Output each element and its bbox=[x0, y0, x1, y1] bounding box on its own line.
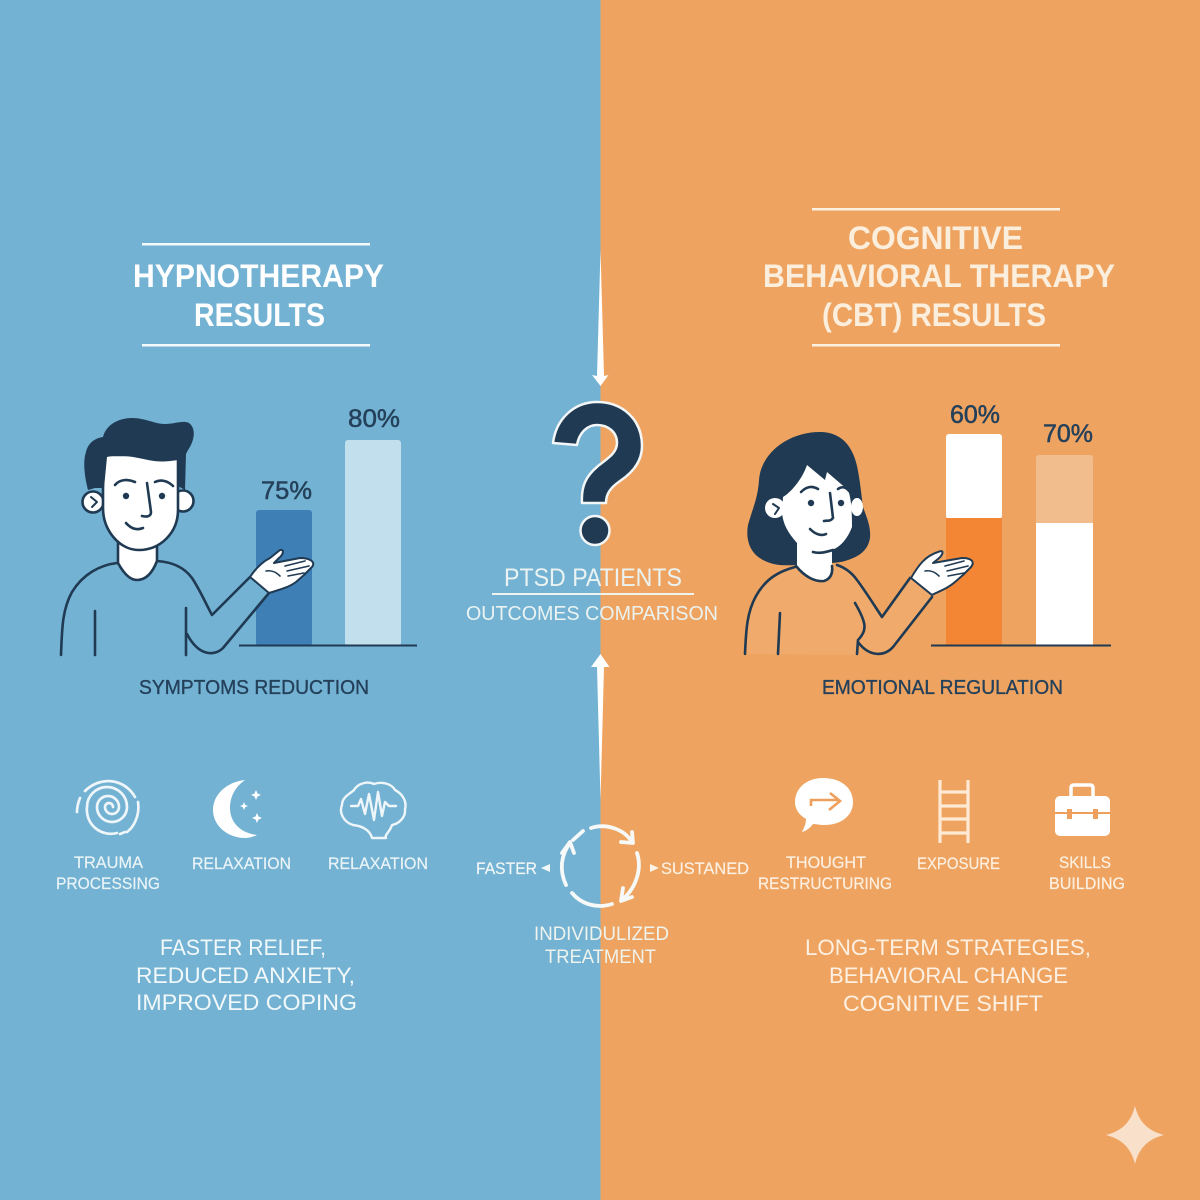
heading: CBT results: COGNITIVE bbox=[848, 220, 1023, 256]
bar chart: symptoms reduction: 80% bbox=[348, 405, 400, 433]
illustration: woman presenting bbox=[745, 432, 973, 655]
icon: speech bubble with arrow bbox=[795, 778, 853, 832]
caption: symptoms reduction: SYMPTOMS REDUCTION bbox=[139, 677, 369, 699]
label: relaxation: RELAXATION bbox=[192, 854, 291, 873]
center label: PTSD patients outcomes comparison: PTSD PATIENTS bbox=[504, 564, 682, 592]
label: trauma processing: PROCESSING bbox=[56, 874, 160, 893]
cycle diagram: faster, sustained: FASTER bbox=[476, 859, 537, 878]
label: individualized treatment bbox=[534, 924, 669, 968]
text block: hypnotherapy benefits: IMPROVED COPING bbox=[136, 990, 357, 1015]
icon: moon and stars, relaxation bbox=[213, 780, 262, 838]
label: exposure: EXPOSURE bbox=[917, 854, 1000, 873]
icon: ladder bbox=[940, 780, 968, 843]
heading: CBT results: (CBT) RESULTS bbox=[822, 297, 1046, 333]
text block: CBT benefits: COGNITIVE SHIFT bbox=[843, 991, 1043, 1016]
panel: CBT background bbox=[600, 0, 1200, 1200]
text block: hypnotherapy benefits: FASTER RELIEF, bbox=[160, 935, 326, 960]
label: individualized treatment: TREATMENT bbox=[545, 947, 656, 968]
cycle diagram: faster, sustained: SUSTANED bbox=[661, 859, 749, 878]
icon: question mark bbox=[553, 402, 642, 545]
label: thought restructuring bbox=[758, 853, 892, 893]
label: trauma processing bbox=[56, 853, 160, 893]
arrow: bottom pointing up bbox=[591, 654, 610, 800]
heading: hypnotherapy results bbox=[133, 243, 384, 346]
icon: brain with wave bbox=[341, 783, 406, 838]
panel: hypnotherapy background bbox=[0, 0, 600, 1200]
illustration: man presenting bbox=[61, 418, 313, 655]
text block: CBT benefits bbox=[805, 935, 1091, 1016]
center label: PTSD patients outcomes comparison bbox=[466, 564, 718, 625]
label: skills building: BUILDING bbox=[1049, 874, 1125, 893]
cycle diagram: faster, sustained bbox=[476, 826, 749, 906]
bar chart: emotional regulation: 70% bbox=[1043, 420, 1093, 448]
bar chart: symptoms reduction bbox=[239, 405, 417, 646]
text block: hypnotherapy benefits: REDUCED ANXIETY, bbox=[136, 963, 355, 988]
bar chart: symptoms reduction: 75% bbox=[261, 477, 312, 505]
text block: CBT benefits: BEHAVIORAL CHANGE bbox=[829, 963, 1068, 988]
text block: hypnotherapy benefits bbox=[136, 935, 357, 1015]
label: skills building bbox=[1049, 853, 1125, 893]
heading: hypnotherapy results: RESULTS bbox=[194, 297, 325, 333]
icon: spiral, trauma processing bbox=[77, 781, 138, 834]
center label: PTSD patients outcomes comparison: OUTCOMES COMPARISON bbox=[466, 603, 718, 625]
label: trauma processing: TRAUMA bbox=[74, 853, 144, 872]
icon: briefcase bbox=[1055, 785, 1110, 836]
label: skills building: SKILLS bbox=[1059, 853, 1111, 872]
label: thought restructuring: RESTRUCTURING bbox=[758, 874, 892, 893]
heading: CBT results bbox=[763, 208, 1115, 346]
heading: hypnotherapy results: HYPNOTHERAPY bbox=[133, 258, 384, 294]
label: relaxation second: RELAXATION bbox=[328, 854, 428, 873]
label: individualized treatment: INDIVIDULIZED bbox=[534, 924, 669, 945]
arrow: top pointing down bbox=[592, 250, 608, 386]
bar chart: emotional regulation bbox=[931, 401, 1111, 646]
caption: emotional regulation: EMOTIONAL REGULATION bbox=[822, 677, 1063, 699]
text block: CBT benefits: LONG-TERM STRATEGIES, bbox=[805, 935, 1091, 960]
icon: sparkle bbox=[1106, 1106, 1164, 1164]
label: thought restructuring: THOUGHT bbox=[786, 853, 866, 872]
bar chart: emotional regulation: 60% bbox=[950, 401, 1000, 429]
heading: CBT results: BEHAVIORAL THERAPY bbox=[763, 258, 1115, 294]
